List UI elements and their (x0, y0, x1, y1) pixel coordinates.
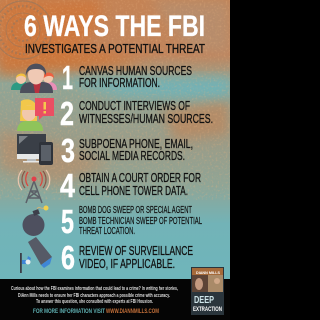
step 5 text (79, 205, 202, 237)
book cover (191, 267, 224, 315)
step 3 (17, 132, 193, 169)
step 4 (18, 167, 201, 204)
step 3 text (79, 137, 193, 163)
number 6: 6 (61, 239, 75, 276)
icon: surveillance camera (20, 237, 52, 273)
number 4: 4 (60, 167, 76, 204)
background (0, 0, 230, 320)
icon: FBI seal (0, 1, 52, 59)
step 1 text: FOR INFORMATION. (79, 76, 160, 90)
step 2 (17, 95, 213, 132)
website line: FOR MORE INFORMATION VISIT (33, 308, 105, 315)
footer band (0, 279, 230, 320)
icon: bomb (22, 206, 48, 236)
icon: group of people (11, 64, 57, 93)
footer paragraph (11, 286, 178, 305)
number 2: 2 (60, 95, 74, 132)
icon: witness with alert bubble (17, 98, 54, 131)
step 2 text (79, 99, 213, 126)
book cover: DEEP (194, 295, 214, 306)
footer paragraph: DiAnn Mills needs to ensure her FBI characters approach a possible crime with accuracy. (18, 293, 170, 299)
step 6 (20, 237, 193, 276)
number 5: 5 (61, 203, 74, 240)
icon: cell tower (18, 170, 50, 203)
step 6 text: VIDEO, IF APPLICABLE. (79, 256, 175, 271)
step 6 text (79, 243, 193, 271)
footer paragraph: To answer this question, she consulted with experts at FBI Houston. (36, 299, 153, 305)
step 4 text (79, 171, 201, 198)
website line: WWW.DIANNMILLS.COM (106, 308, 159, 315)
step 5 (22, 203, 202, 240)
icon: computer and phone (17, 134, 53, 165)
step 5 text: THREAT LOCATION. (79, 226, 135, 237)
number 3: 3 (61, 132, 75, 169)
book cover: DIANN MILLS (196, 270, 220, 275)
step 1 (11, 59, 192, 96)
number 1: 1 (62, 59, 73, 96)
step 1 text (79, 64, 192, 90)
